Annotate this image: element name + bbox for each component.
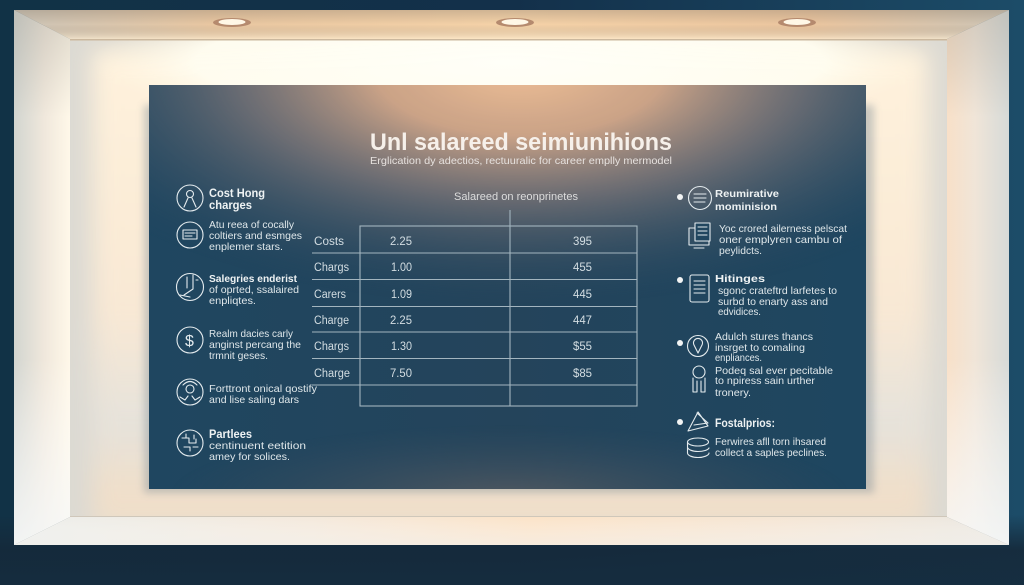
- text: realm: trmnit geses.: [209, 351, 268, 362]
- text: partlees: [209, 429, 306, 463]
- dark display panel: [149, 85, 866, 489]
- row 2: 455: [573, 262, 592, 274]
- bullet: [677, 277, 683, 283]
- text: realm: Realm dacies carly: [209, 329, 294, 340]
- text: ferwires: [715, 437, 827, 459]
- row 5: 1.30: [391, 341, 412, 353]
- icon: coin stack: [688, 438, 709, 458]
- text: partlees: Partlees: [209, 429, 252, 441]
- text: yoc: [719, 224, 847, 257]
- ceiling: [14, 10, 1009, 39]
- text: adulch: Adulch stures thancs: [715, 332, 813, 343]
- subtitle: Erglication dy adectios, rectuuralic for career emplly mermodel: [370, 155, 672, 167]
- text: salegries: enpliqtes.: [209, 296, 256, 307]
- ceiling light left: [213, 18, 251, 27]
- row 4: 2.25: [390, 315, 412, 327]
- row 2: Chargs: [314, 262, 349, 274]
- text: forttront: [209, 384, 318, 406]
- row 1: 395: [573, 236, 592, 248]
- row 6: [314, 368, 592, 380]
- row 4: Charge: [314, 315, 349, 327]
- text: forttront: and lise saling dars: [209, 395, 299, 406]
- icon: dollar: [177, 327, 203, 353]
- ceiling light center: [496, 18, 534, 27]
- text: cost description: enplemer stars.: [209, 242, 283, 253]
- row 4: [314, 315, 592, 327]
- text: ferwires: Ferwires afll torn ihsared: [715, 437, 826, 448]
- text: podeq: to npiress sain urther: [715, 376, 816, 387]
- table heading: Salareed on reonprinetes: [454, 191, 579, 203]
- icon: tool: [176, 274, 204, 300]
- row 5: [314, 341, 592, 353]
- panel shadow: [144, 105, 874, 493]
- title: Unl salareed seimiunihions: [370, 129, 672, 156]
- text: hitinges: edvidices.: [718, 307, 761, 318]
- text: realm: [209, 329, 301, 362]
- text: forttront: Forttront onical qostify: [209, 384, 318, 395]
- ceiling light right: [778, 18, 816, 27]
- text: salegries: Salegries enderist: [209, 273, 297, 285]
- text: salegries: [209, 273, 299, 307]
- right wall: [947, 10, 1009, 545]
- row 6: 7.50: [390, 368, 412, 380]
- text: adulch: enpliances.: [715, 353, 762, 364]
- icon: cone: [688, 412, 708, 431]
- back wall: [70, 39, 947, 530]
- icon: location pin: [688, 336, 708, 356]
- row 3: 445: [573, 289, 592, 301]
- left wall: [14, 10, 70, 545]
- table: [312, 210, 637, 406]
- bullet: [677, 340, 683, 346]
- text: salegries: of oprted, ssalaired: [209, 285, 299, 296]
- left column: [176, 185, 318, 463]
- row 5: $55: [573, 341, 592, 353]
- row 1: 2.25: [390, 236, 412, 248]
- row 6: Charge: [314, 368, 350, 380]
- icon: person: [177, 185, 203, 211]
- text: partlees: amey for solices.: [209, 452, 290, 463]
- text: podeq: tronery.: [715, 388, 751, 399]
- icon: dollar: $: [185, 333, 194, 350]
- row 4: 447: [573, 315, 592, 327]
- text: adulch: [715, 332, 813, 364]
- row 1: Costs: [314, 236, 344, 248]
- text: hitinges: sgonc crateftrd larfetes to: [718, 286, 837, 297]
- text: adulch: insrget to comaling: [715, 343, 805, 354]
- icon: document: [690, 275, 709, 302]
- heading: reumirative: Reumirative: [715, 188, 779, 200]
- right column: [677, 186, 847, 459]
- bullet: [677, 419, 683, 425]
- text: hitinges: Hitinges: [715, 273, 765, 285]
- text: yoc: oner emplyren cambu of: [719, 235, 842, 246]
- bullet: [677, 194, 683, 200]
- text: cost description: [209, 220, 302, 253]
- text: ferwires: collect a saples peclines.: [715, 448, 827, 459]
- text: yoc: peylidcts.: [719, 246, 762, 257]
- row 2: 1.00: [391, 262, 412, 274]
- icon: person figure: [693, 366, 705, 392]
- text: podeq: Podeq sal ever pecitable: [715, 366, 833, 377]
- text: hitinges: [715, 273, 837, 318]
- row 5: Chargs: [314, 341, 349, 353]
- icon: document monitor: [689, 223, 710, 248]
- text: hitinges: surbd to enarty ass and: [718, 297, 828, 308]
- row 3: Carers: [314, 289, 346, 301]
- icon: list circle: [688, 186, 712, 210]
- row 3: [314, 289, 592, 301]
- heading: reumirative: mominision: [715, 201, 777, 213]
- text: realm: anginst percang the: [209, 340, 301, 351]
- text: partlees: centinuent eetition: [209, 441, 306, 452]
- floor: [14, 517, 1009, 545]
- icon: people: [177, 379, 203, 405]
- icon: card: [177, 222, 203, 248]
- row 1: [314, 236, 592, 248]
- heading: cost hong charges: Cost Hong: [209, 188, 265, 200]
- text: cost description: coltiers and esmges: [209, 231, 302, 242]
- row 2: [314, 262, 592, 274]
- row 6: $85: [573, 368, 592, 380]
- text: podeq: [715, 366, 833, 399]
- text: yoc: Yoc crored ailerness pelscat: [719, 224, 847, 235]
- text: cost description: Atu reea of cocally: [209, 220, 295, 231]
- heading: fostalprios: Fostalprios:: [715, 418, 775, 430]
- heading: cost hong charges: [209, 188, 265, 212]
- heading: reumirative: [715, 188, 779, 213]
- icon: network: [177, 430, 203, 456]
- heading: cost hong charges: charges: [209, 200, 252, 212]
- row 3: 1.09: [391, 289, 412, 301]
